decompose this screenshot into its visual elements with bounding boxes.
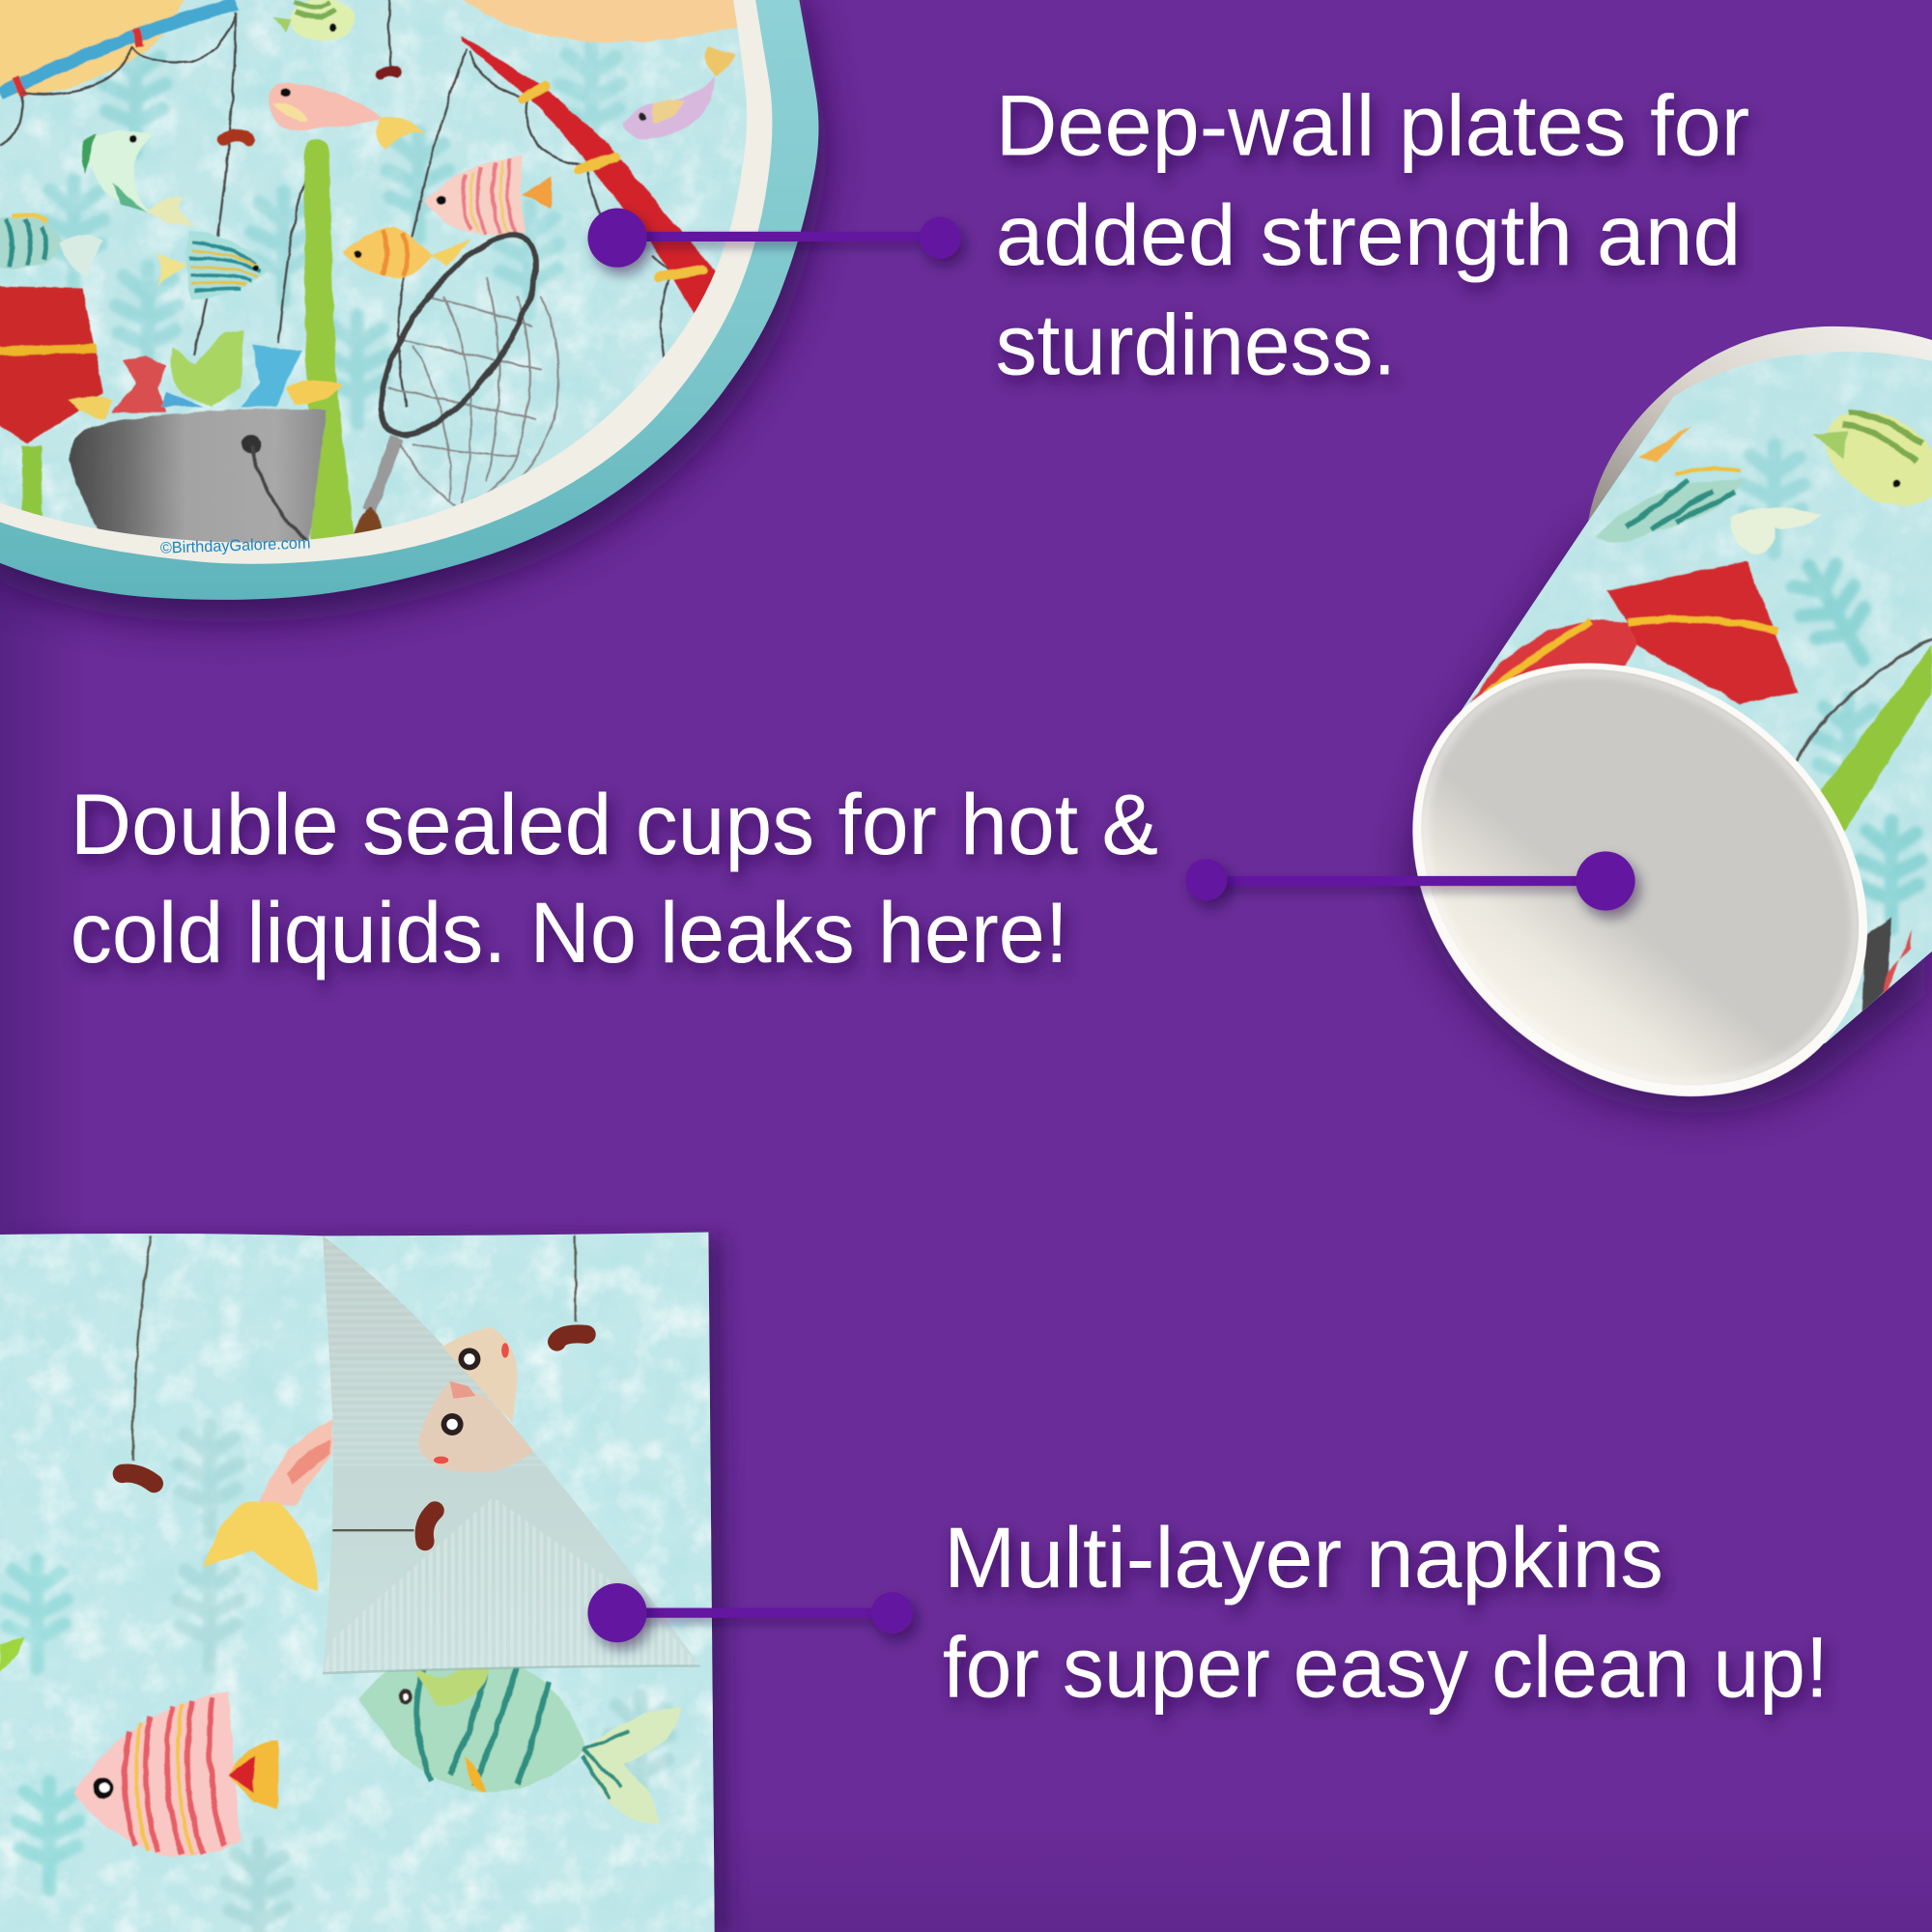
callout dot: cup large	[1576, 851, 1635, 911]
callout dot: napkin small	[871, 1592, 913, 1634]
cup rim	[1588, 327, 1932, 522]
plate white wall	[0, 0, 772, 564]
teal fish on cup	[1596, 425, 1821, 554]
cup base inner highlight	[1344, 588, 1932, 1166]
panel: napkin	[0, 1230, 729, 1932]
bucket and tail bits on cup	[1861, 918, 1891, 1023]
red baits	[224, 135, 249, 139]
text: plates: Deep-wall plates for	[996, 77, 1749, 174]
red flag	[0, 286, 103, 524]
fishing lines	[0, 0, 671, 407]
pink koi fish	[269, 83, 425, 151]
callout line: napkin	[617, 1608, 892, 1618]
blue fishing rod	[0, 4, 237, 94]
fish head seen through fold	[418, 1327, 533, 1472]
napkin printed sheet	[0, 1230, 721, 1932]
fold fishing line	[332, 1529, 414, 1531]
napkin shadow	[14, 1237, 729, 1932]
striped teal fish	[156, 231, 271, 299]
cup base outer ring	[1326, 574, 1932, 1186]
callout line: plate	[617, 232, 940, 242]
hanging lines	[133, 1236, 576, 1462]
text: cups: Double sealed cups for hot &	[71, 776, 1158, 872]
text: plates: added strength and	[996, 186, 1741, 283]
text: napkins	[943, 1509, 1829, 1715]
landing net	[352, 213, 564, 549]
callout dot: plate large	[587, 209, 647, 268]
purple fish	[623, 46, 735, 139]
callout dot: napkin large	[587, 1583, 647, 1642]
yellow green fish on cup	[1809, 392, 1932, 525]
panel: paper cup	[1326, 327, 1932, 1186]
grey bucket	[71, 409, 327, 549]
brown baits	[122, 1334, 586, 1542]
green fish	[81, 130, 195, 225]
text: plates	[996, 77, 1749, 393]
top small fish	[273, 0, 355, 41]
plate printed artwork	[0, 0, 782, 573]
callout dot: cup small	[1185, 859, 1227, 900]
cup wall with print	[1441, 345, 1932, 1084]
pink striped fish	[74, 1691, 278, 1856]
boat hull right	[455, 0, 743, 43]
text: napkins: Multi-layer napkins	[944, 1509, 1663, 1605]
plate drop shadow	[0, 0, 826, 622]
koi tail section	[203, 1419, 332, 1592]
red flag on cup	[1606, 560, 1798, 703]
callout line: cup	[1207, 876, 1605, 886]
text: plates: sturdiness.	[996, 297, 1396, 393]
pink striped fish	[424, 156, 552, 235]
plate teal rim	[0, 0, 818, 600]
red fishing rod	[461, 36, 721, 318]
cup base inside	[1338, 583, 1932, 1172]
tall green reed	[304, 139, 355, 542]
panel: paper plate	[0, 0, 826, 622]
boat hull left	[0, 0, 187, 96]
napkin folded corner	[323, 1233, 705, 1673]
watermark: ©BirthdayGalore.com	[160, 533, 311, 557]
green reed and wire on cup	[1820, 645, 1932, 832]
teal fish under fold	[359, 1663, 681, 1824]
text: napkins: for super easy clean up!	[943, 1618, 1829, 1715]
text: cups	[71, 776, 1158, 980]
fish tails in bucket	[68, 330, 343, 419]
cup shadow	[1407, 367, 1924, 1113]
text: cups: cold liquids. No leaks here!	[71, 884, 1068, 980]
yellow fish	[344, 227, 470, 278]
left teal fish	[0, 214, 103, 277]
callout dot: plate small	[920, 216, 961, 259]
